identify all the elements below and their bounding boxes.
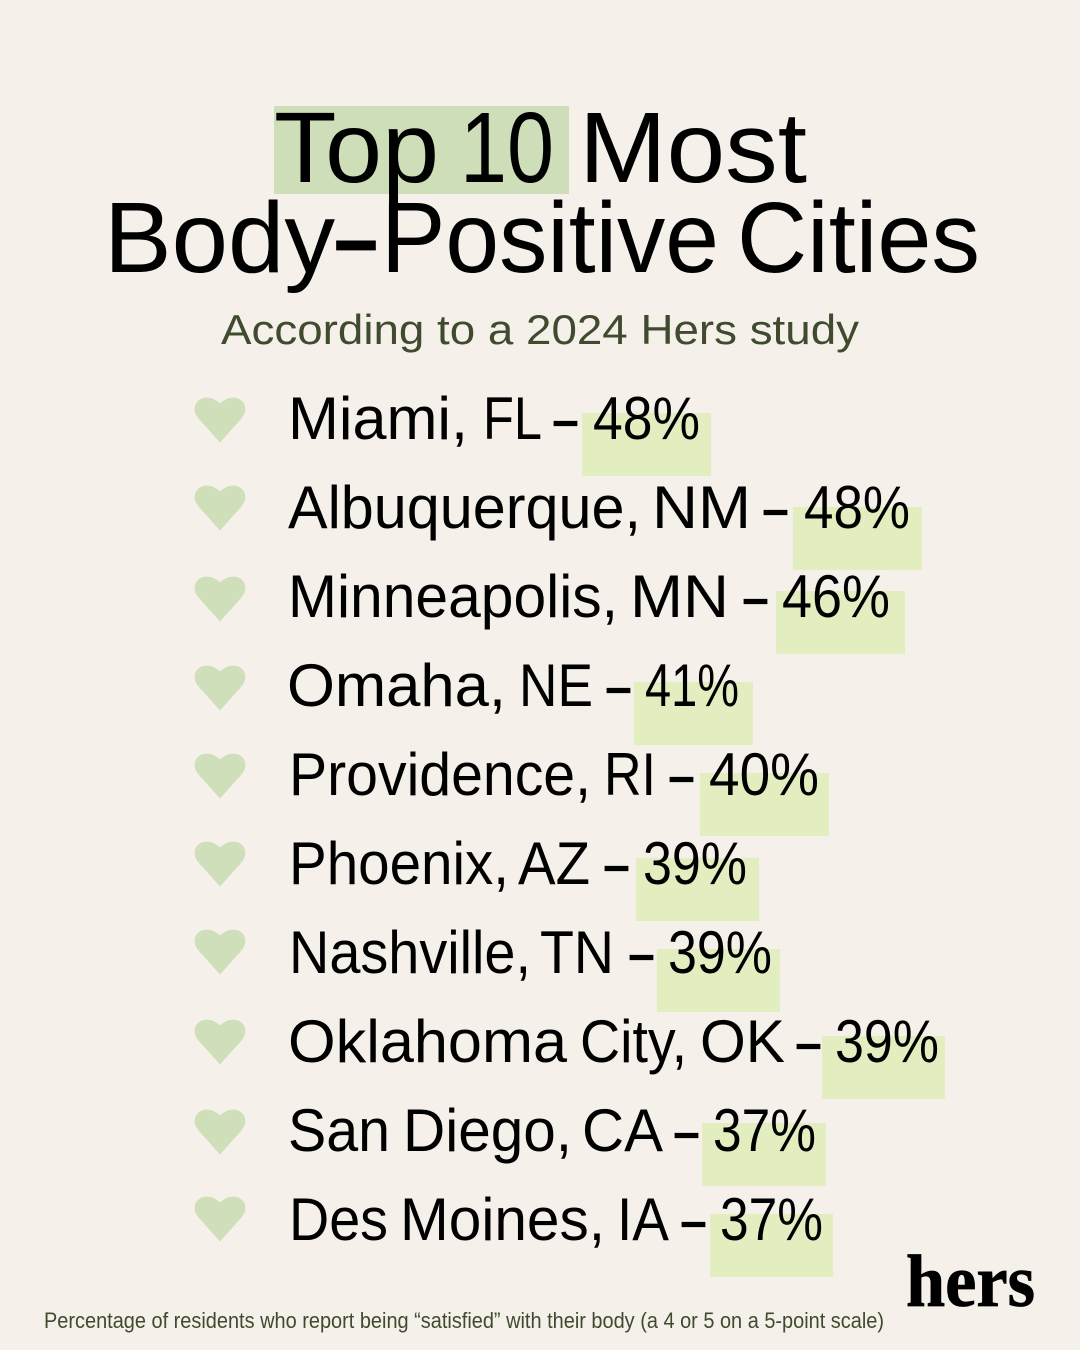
title	[104, 92, 980, 294]
row: Nashville	[195, 919, 780, 1012]
row: Providence: RI	[604, 741, 656, 808]
row: Des Moines: 37%	[720, 1186, 823, 1253]
row: Albuquerque: NM	[652, 474, 751, 541]
row: Des Moines: Des	[289, 1186, 388, 1253]
row: Des Moines: –	[682, 1186, 705, 1253]
row: Oklahoma City: 39%	[835, 1008, 939, 1075]
row: Minneapolis: 46%	[782, 563, 890, 630]
row: San Diego	[195, 1097, 826, 1186]
row: San Diego: Diego,	[403, 1097, 572, 1164]
row: Omaha: NE	[519, 652, 593, 719]
row: Nashville: 39%	[668, 919, 772, 986]
row: Oklahoma City	[195, 1008, 945, 1099]
row: Providence: Providence,	[289, 741, 591, 808]
title: Top	[274, 92, 439, 204]
row: Phoenix: –	[605, 830, 628, 897]
title: 10	[460, 92, 554, 204]
row: San Diego: 37%	[713, 1097, 816, 1164]
title: -	[331, 182, 381, 294]
row: Minneapolis	[195, 563, 905, 654]
row: Providence: 40%	[709, 741, 819, 808]
title: Most	[579, 92, 807, 204]
row: Miami: –	[554, 385, 577, 452]
row: Minneapolis: MN	[630, 563, 729, 630]
row: San Diego: CA	[582, 1097, 663, 1164]
row: Phoenix: AZ	[518, 830, 590, 897]
row: Phoenix	[195, 830, 759, 921]
row: Miami: 48%	[593, 385, 700, 452]
title: Positive	[381, 182, 719, 294]
row: Nashville: Nashville,	[289, 919, 531, 986]
row: Providence	[195, 741, 829, 836]
ranked city list	[195, 385, 945, 1277]
row: Miami	[195, 385, 711, 476]
subtitle: According to a 2024 Hers study	[221, 306, 859, 353]
row: Albuquerque	[195, 474, 922, 570]
row: Oklahoma City: –	[797, 1008, 820, 1075]
logo: hers: hers	[906, 1241, 1035, 1323]
row: Miami: FL	[483, 385, 542, 452]
row: Phoenix: 39%	[643, 830, 747, 897]
row: Oklahoma City: City,	[580, 1008, 687, 1075]
row: Des Moines: Moines,	[400, 1186, 605, 1253]
row: Nashville: TN	[540, 919, 614, 986]
row: Omaha	[195, 652, 753, 745]
row: Providence: –	[670, 741, 693, 808]
row: Des Moines	[195, 1186, 833, 1277]
title: Body	[104, 182, 335, 294]
row: Phoenix: Phoenix,	[289, 830, 509, 897]
footnote: Percentage of residents who report being “satisfied” with their body (a 4 or 5 on a 5-point scale)	[44, 1308, 884, 1333]
title: Cities	[737, 182, 980, 294]
row: Minneapolis: Minneapolis,	[288, 563, 618, 630]
row: Nashville: –	[630, 919, 653, 986]
row: Minneapolis: –	[744, 563, 767, 630]
row: Omaha: Omaha,	[287, 652, 506, 719]
row: Albuquerque: –	[764, 474, 787, 541]
row: Omaha: –	[607, 652, 630, 719]
row: Albuquerque: 48%	[804, 474, 910, 541]
row: Oklahoma City: OK	[700, 1008, 785, 1075]
row: Des Moines: IA	[617, 1186, 669, 1253]
row: Oklahoma City: Oklahoma	[288, 1008, 568, 1075]
row: Omaha: 41%	[645, 652, 739, 719]
row: Albuquerque: Albuquerque,	[288, 474, 641, 541]
row: San Diego: –	[675, 1097, 698, 1164]
row: San Diego: San	[288, 1097, 390, 1164]
row: Miami: Miami,	[288, 385, 468, 452]
